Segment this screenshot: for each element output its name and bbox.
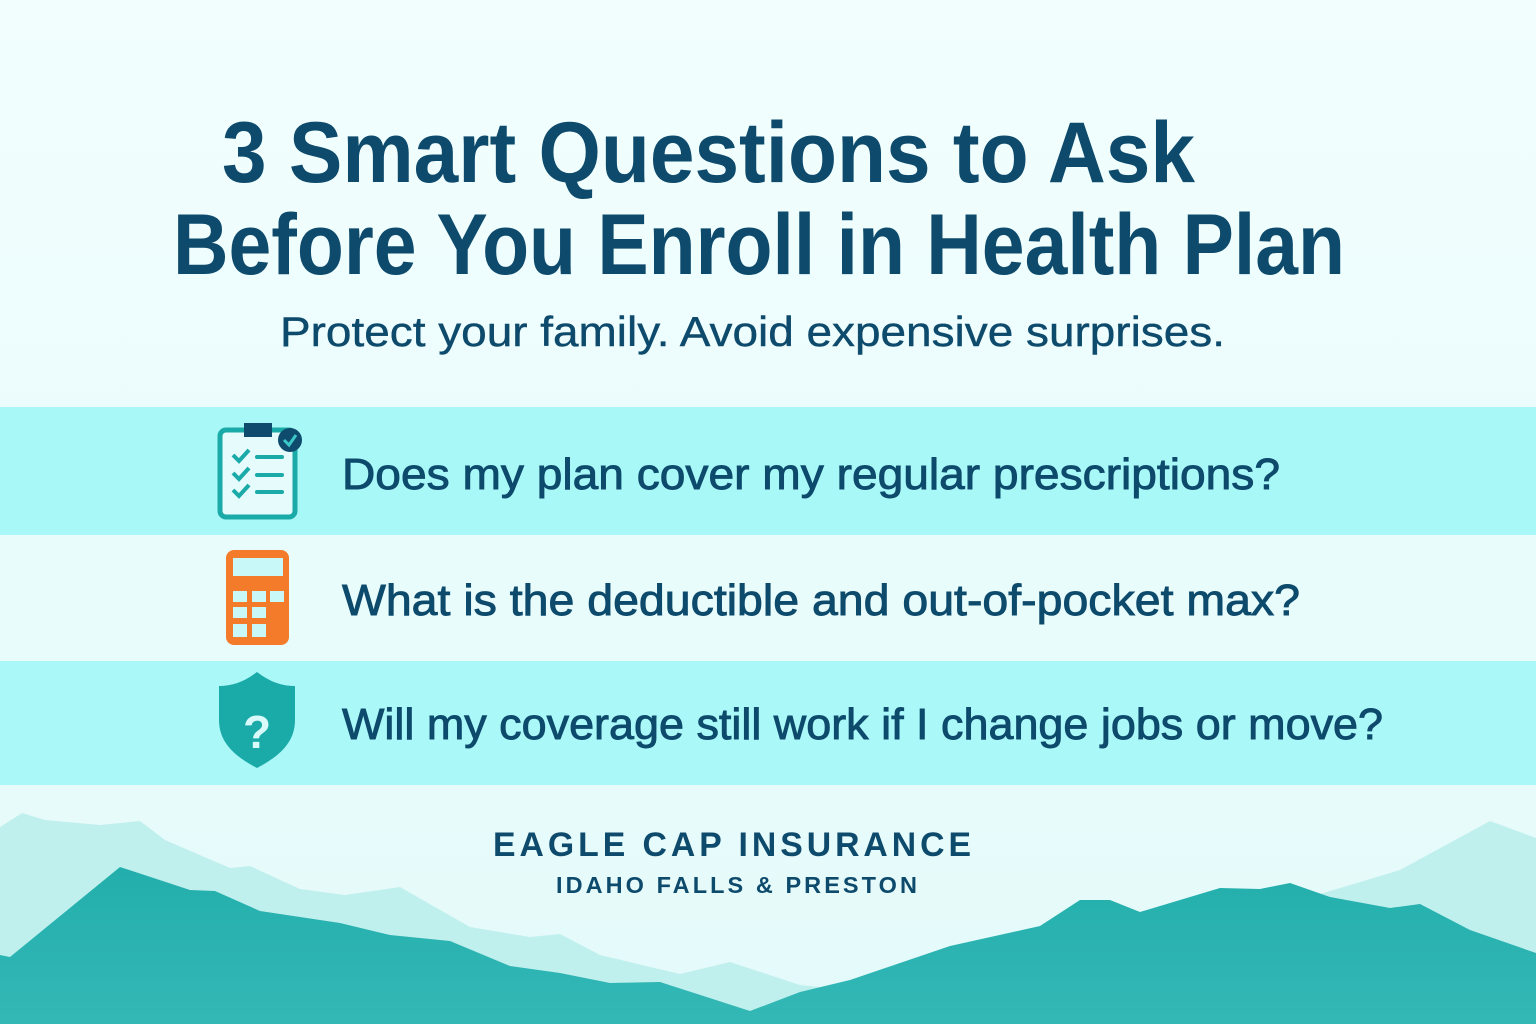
question text 1: Does my plan cover my regular prescriptions? xyxy=(342,450,1280,499)
question text 2: What is the deductible and out-of-pocket max? xyxy=(342,576,1300,625)
panel: question 2 xyxy=(0,535,1536,661)
mountains xyxy=(0,813,1536,1024)
subtitle: Protect your family. Avoid expensive surprises. xyxy=(280,308,1225,355)
panel: question 1 xyxy=(0,407,1536,535)
panel: question 3 xyxy=(0,661,1536,785)
icon: shield question: ? xyxy=(243,706,271,758)
footer brand: IDAHO FALLS & PRESTON xyxy=(556,872,920,898)
title xyxy=(173,105,1345,293)
title: 3 Smart Questions to Ask xyxy=(222,105,1195,201)
footer brand xyxy=(493,826,975,898)
title: Before You Enroll in Health Plan xyxy=(173,197,1345,293)
icon: clipboard checklist xyxy=(220,423,302,517)
footer brand: EAGLE CAP INSURANCE xyxy=(493,826,975,864)
question text 3: Will my coverage still work if I change jobs or move? xyxy=(342,700,1383,749)
icon: calculator xyxy=(226,550,289,645)
icon: shield question xyxy=(219,672,295,768)
